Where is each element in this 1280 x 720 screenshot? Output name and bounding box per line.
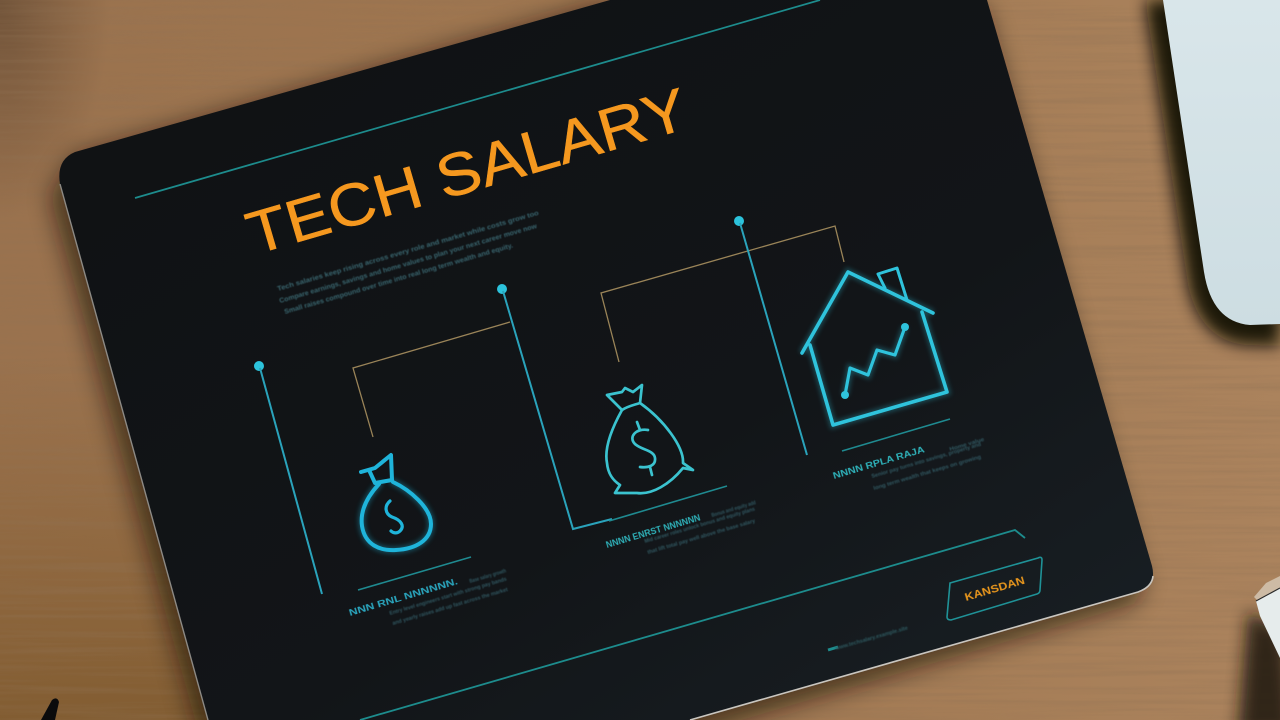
- step 1 bracket: [353, 322, 510, 437]
- icon: large money bag: [606, 385, 693, 493]
- step 1 underline: [358, 557, 471, 590]
- step 1 note: Entry level engineers start with strong pay bands: [389, 577, 508, 617]
- step 2 note: [644, 500, 757, 556]
- step 3 pin line: [734, 216, 807, 455]
- intro text block: Compare earnings, savings and home values to plan your next career move now: [279, 223, 538, 305]
- step 3 note: long term wealth that keeps on growing: [873, 454, 982, 492]
- top teal rule: [135, 0, 820, 198]
- step 3 underline: [842, 419, 950, 451]
- step 3 label: NNNN RPLA RAJA: [832, 444, 926, 482]
- step 1 note: [389, 568, 509, 627]
- step 1 pin line: [254, 361, 322, 594]
- step 1: money bag: [254, 322, 510, 627]
- intro text block: Tech salaries keep rising across every role and market while costs grow too: [277, 210, 540, 293]
- step 2: money bag: [497, 226, 844, 556]
- step 2 note: Bonus and equity add: [711, 500, 757, 519]
- step 2 note: that lift total pay well above the base salary: [647, 518, 757, 556]
- step 3 note: Home value: [949, 437, 985, 453]
- step 2 label: NNNN ENRST NNNNNN: [605, 512, 702, 551]
- white monitor corner, top right: [1145, 0, 1280, 346]
- step 2 pin line: [497, 284, 612, 529]
- step 1 note: Base salary growth: [469, 568, 507, 585]
- white object, lower right edge: [1238, 576, 1280, 720]
- title: TECH SALARY: [239, 75, 695, 267]
- button: outlined label: KANSDAN: [963, 575, 1026, 604]
- black pen tip, lower left: [41, 698, 59, 720]
- step 1 note: and yearly raises add up fast across the market: [392, 587, 509, 627]
- step 2 bracket: [601, 226, 844, 362]
- step 3: house with rising chart: [734, 216, 985, 492]
- step 3 note: [871, 437, 985, 492]
- icon: small money bag: [361, 455, 431, 550]
- footer note: www.techsalary.example.site: [834, 625, 909, 652]
- button: outlined label: [947, 557, 1042, 620]
- intro text block: Small raises compound over time into real long term wealth and equity.: [284, 242, 514, 316]
- step 2 underline: [609, 486, 727, 521]
- step 3 note: Senior pay turns into savings, property and: [871, 442, 982, 480]
- step 1 label: NNN RNL NNNNNN.: [348, 576, 459, 619]
- icon: house with growth line: [802, 268, 947, 425]
- bottom teal rule: [360, 530, 1025, 720]
- step 2 note: Mid career roles unlock bonus and equity plans: [644, 507, 756, 545]
